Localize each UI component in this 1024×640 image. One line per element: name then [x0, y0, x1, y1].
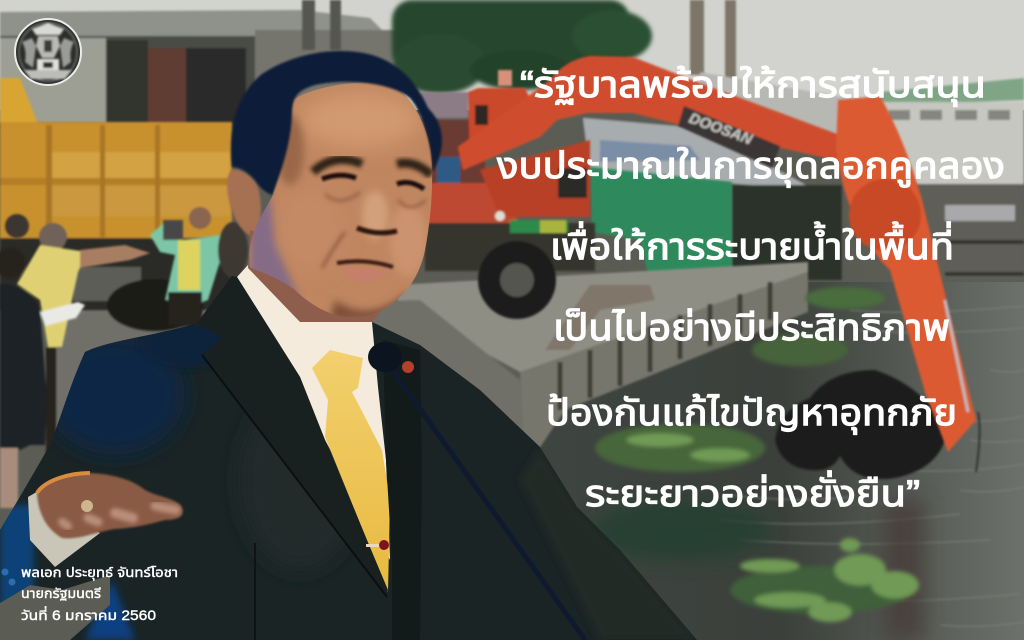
right building [860, 78, 1024, 280]
yellow truck [0, 78, 240, 331]
shirt collar [237, 265, 390, 560]
hair [231, 51, 442, 195]
tree [392, 0, 652, 94]
green tarp [590, 167, 732, 288]
emblem: government seal [15, 19, 81, 85]
portrait: prime minister [0, 51, 697, 640]
sky [0, 0, 1024, 110]
caption: speaker name and date: วันที่ 6 มกราคม 2560 [21, 606, 156, 623]
quote text: ระยะยาวอย่างยั่งยืน” [585, 470, 920, 514]
tie [312, 350, 390, 592]
lapels [197, 276, 422, 640]
excavator: DOOSAN [687, 110, 755, 149]
left house [0, 0, 410, 130]
concrete ground and canal wall [30, 262, 808, 520]
cuff [28, 490, 100, 567]
caption: speaker name and date: พลเอก ประยุทธ์ จันทร์โอชา [21, 565, 178, 581]
mud pile [775, 370, 948, 479]
quote text: ป้องกันแก้ไขปัญหาอุทกภัย [546, 392, 957, 435]
quote text: เพื่อให้การระบายน้ำในพื้นที่ [550, 221, 954, 267]
sleeve buttons [2, 568, 16, 586]
quote text: งบประมาณในการขุดลอกคูคลอง [497, 145, 1005, 188]
suit [0, 276, 697, 640]
neck [248, 230, 390, 322]
onlookers [0, 207, 248, 508]
quote text: เป็นไปอย่างมีประสิทธิภาพ [553, 307, 950, 348]
water hyacinth patches [595, 287, 919, 622]
water [540, 282, 1024, 640]
caption: speaker name and date [21, 565, 178, 623]
microphone [368, 342, 585, 640]
excavator [420, 56, 980, 472]
tie pin [366, 540, 389, 550]
face [250, 82, 432, 318]
caption: speaker name and date: นายกรัฐมนตรี [21, 586, 101, 601]
quote text [497, 64, 1005, 514]
shop house behind excavator [580, 72, 860, 280]
quote text: “รัฐบาลพร้อมให้การสนับสนุน [520, 64, 986, 107]
pocket [254, 543, 256, 640]
utility poles [690, 0, 736, 85]
ear [227, 170, 261, 236]
hand [37, 473, 183, 538]
